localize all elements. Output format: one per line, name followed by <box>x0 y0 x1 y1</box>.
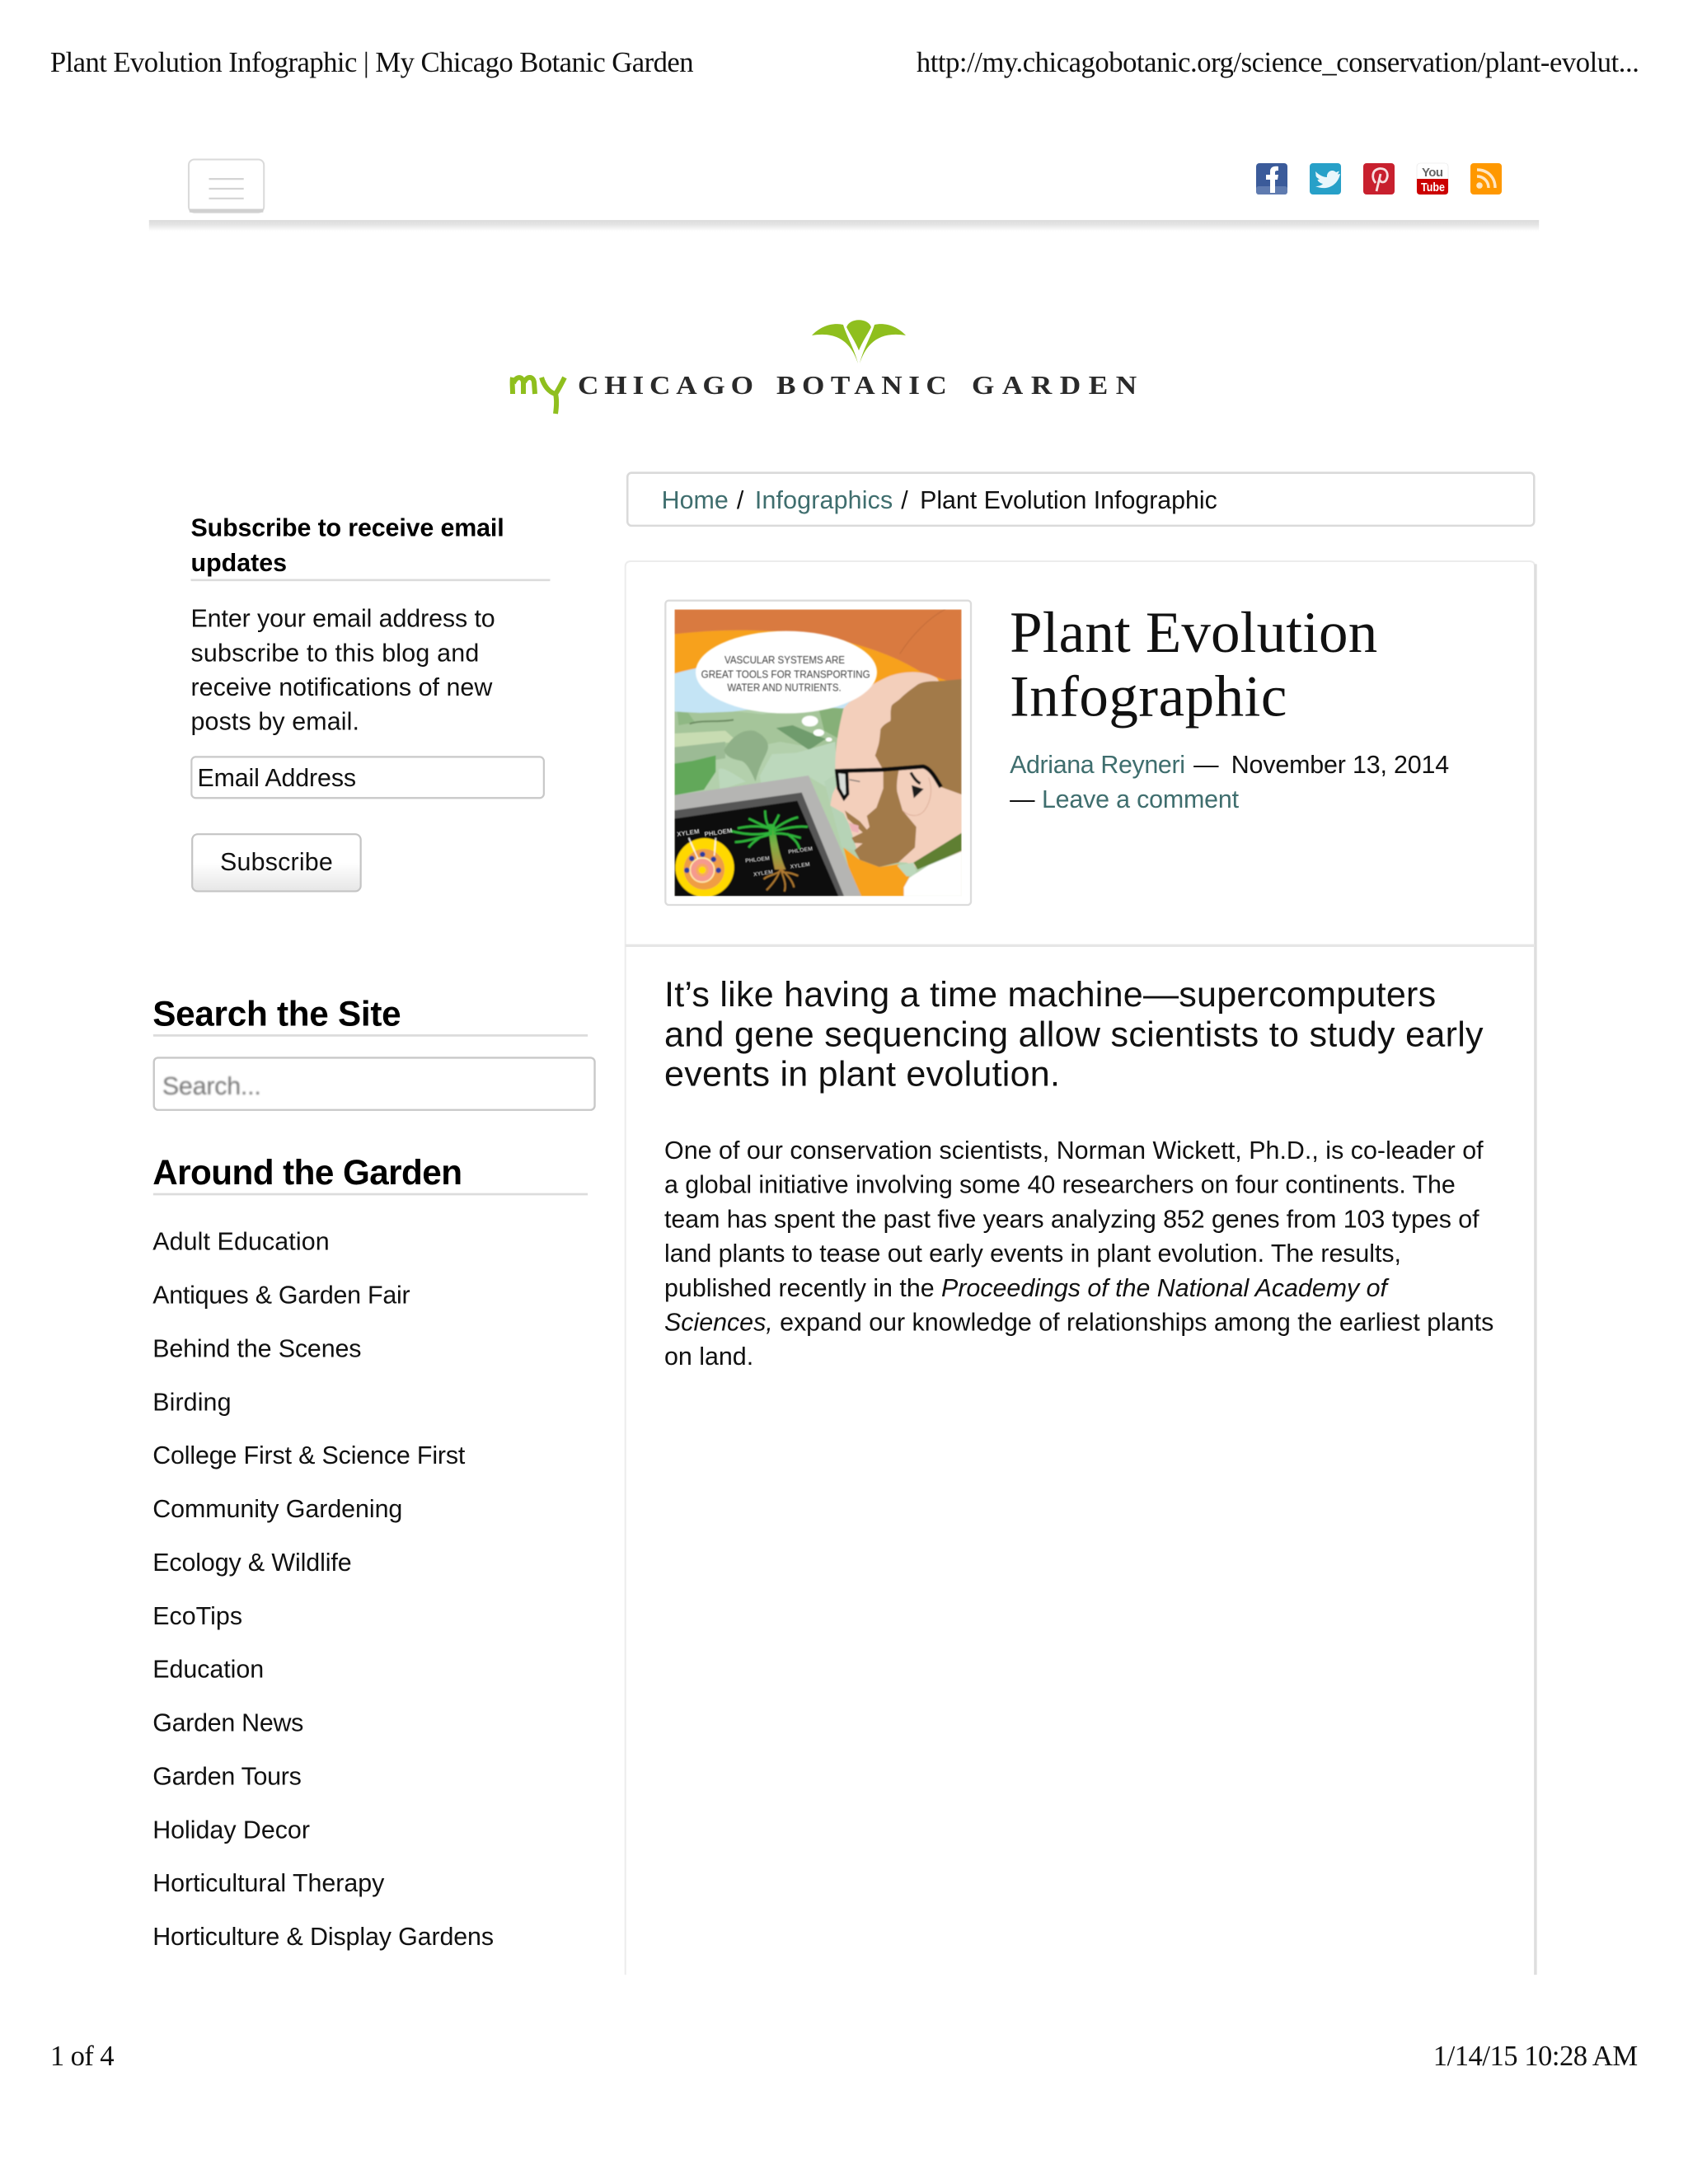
beard <box>845 769 917 867</box>
logo wordmark: Chicago Botanic Garden: CHICAGO <box>578 371 753 401</box>
article body text: team has spent the past five years analyzing 852 genes from 103 types of <box>664 1206 1479 1234</box>
category list: Community Gardening <box>152 1495 402 1523</box>
article intro: and gene sequencing allow scientists to study early <box>664 1015 1484 1054</box>
article meta: author and date: — <box>1010 785 1035 813</box>
logo wordmark: Chicago Botanic Garden: GARDEN <box>972 371 1137 401</box>
breadcrumb bar: Home <box>662 486 729 514</box>
thought bubble: GREAT TOOLS FOR TRANSPORTING <box>701 669 870 681</box>
subscribe heading: Subscribe to receive email <box>190 514 504 542</box>
article intro: events in plant evolution. <box>664 1055 1060 1094</box>
category list: College First & Science First <box>152 1441 466 1469</box>
breadcrumb bar <box>627 473 1534 526</box>
icon: youtube: You <box>1422 166 1443 180</box>
icon: green leaf <box>812 319 906 363</box>
article title: Plant Evolution <box>1010 601 1377 665</box>
logo wordmark: Chicago Botanic Garden <box>578 371 1137 401</box>
article title <box>1010 601 1377 729</box>
category list: EcoTips <box>152 1602 242 1630</box>
breadcrumb bar: Plant Evolution Infographic <box>920 486 1217 514</box>
search heading: Search the Site <box>152 995 401 1033</box>
subscribe button <box>192 834 361 891</box>
category list: Education <box>152 1655 264 1683</box>
article body text <box>664 1137 1493 1371</box>
ear <box>903 777 931 816</box>
article body text: on land. <box>664 1343 753 1371</box>
article body text: land plants to tease out early events in plant evolution. The results, <box>664 1240 1401 1268</box>
tablet screen labels: XYLEM <box>790 862 810 870</box>
tablet screen labels: PHLOEM <box>788 846 814 855</box>
subscribe description: Enter your email address to <box>190 604 495 632</box>
panel: article <box>626 561 1536 1975</box>
head skin <box>830 673 962 868</box>
logo wordmark: my: my <box>511 393 513 395</box>
icon: twitter <box>1310 163 1341 194</box>
article body text: published recently in the Proceedings of the National Academy of <box>664 1274 1390 1302</box>
tablet screen labels <box>677 827 814 878</box>
panel outline <box>626 561 1535 1975</box>
article meta: author and date: Adriana Reyneri <box>1010 751 1185 779</box>
article meta: author and date: November 13, 2014 <box>1231 751 1449 779</box>
icon: facebook <box>1256 163 1287 194</box>
article title: Infographic <box>1010 665 1287 729</box>
thought bubble: VASCULAR SYSTEMS ARE <box>724 654 845 666</box>
social icons <box>1256 163 1502 194</box>
subscribe description <box>190 604 495 735</box>
article body text: Sciences, expand our knowledge of relationships among the earliest plants <box>664 1309 1493 1337</box>
article intro: It’s like having a time machine—supercomputers <box>664 975 1436 1015</box>
category list: Horticultural Therapy <box>152 1869 385 1897</box>
article body text: One of our conservation scientists, Norman Wickett, Ph.D., is co-leader of <box>664 1137 1484 1165</box>
tablet screen labels: PHLOEM <box>745 856 770 865</box>
icon: menu button <box>189 159 264 213</box>
thought bubble: WATER AND NUTRIENTS. <box>727 682 842 694</box>
breadcrumb bar: / <box>737 486 744 514</box>
category list: Holiday Decor <box>152 1816 310 1844</box>
tablet screen labels: PHLOEM <box>704 827 733 838</box>
thought bubble <box>696 631 877 742</box>
article meta: author and date: Leave a comment <box>1042 785 1240 813</box>
glasses <box>835 766 941 787</box>
logo: My Chicago Botanic Garden <box>511 319 1137 414</box>
category list: Antiques & Garden Fair <box>152 1282 410 1310</box>
navigation bar line <box>149 220 1539 232</box>
article meta: author and date: — <box>1193 751 1219 779</box>
icon: rss <box>1470 163 1502 194</box>
page header: document title: Plant Evolution Infographic | My Chicago Botanic Garden <box>50 47 694 78</box>
breadcrumb bar: Infographics <box>755 486 893 514</box>
sidebar: around the garden <box>152 1153 588 1951</box>
sidebar: subscribe widget <box>190 514 550 891</box>
category list: Birding <box>152 1389 232 1417</box>
tablet <box>674 776 861 896</box>
category list: Horticulture & Display Gardens <box>152 1923 494 1951</box>
logo wordmark: Chicago Botanic Garden: BOTANIC <box>776 371 947 401</box>
category list: Garden Tours <box>152 1762 302 1790</box>
around the garden heading: Around the Garden <box>152 1153 462 1192</box>
category list: Garden News <box>152 1708 303 1736</box>
tablet screen labels: XYLEM <box>753 869 774 878</box>
hair <box>875 679 962 794</box>
email input <box>191 757 544 798</box>
category list: Adult Education <box>152 1228 330 1256</box>
subscribe button: Subscribe <box>220 848 333 876</box>
page footer: print timestamp: 1/14/15 10:28 AM <box>1433 2041 1638 2072</box>
category list: Behind the Scenes <box>152 1335 361 1363</box>
stem cross-section <box>675 838 734 897</box>
orange chair and shirt <box>843 847 909 896</box>
subscribe heading <box>190 514 550 580</box>
icon: youtube <box>1417 163 1448 194</box>
plant tree <box>768 824 785 869</box>
subscribe heading: updates <box>190 549 287 577</box>
category list <box>152 1228 494 1951</box>
article intro <box>664 975 1484 1094</box>
article meta: author and date <box>1010 751 1449 813</box>
category list: Ecology & Wildlife <box>152 1549 352 1577</box>
search box <box>154 1057 595 1110</box>
subscribe description: posts by email. <box>190 707 359 735</box>
logo wordmark: my <box>511 377 565 414</box>
illustration: scientist with plant vascular system on a tablet <box>665 601 971 905</box>
sidebar: search the site <box>152 995 595 1110</box>
page header: source URL: http://my.chicagobotanic.org/science_conservation/plant-evolut... <box>917 47 1639 78</box>
article body text: a global initiative involving some 40 researchers on four continents. The <box>664 1170 1456 1198</box>
tablet screen labels: XYLEM <box>677 827 701 838</box>
subscribe description: subscribe to this blog and <box>190 640 479 668</box>
breadcrumb bar: / <box>901 486 908 514</box>
icon: youtube: Tube <box>1421 180 1445 194</box>
email input: Email Address <box>197 764 356 792</box>
search box: Search... <box>162 1072 261 1100</box>
window landscape <box>676 709 961 897</box>
subscribe description: receive notifications of new <box>190 673 493 701</box>
page footer: page number: 1 of 4 <box>50 2041 115 2072</box>
icon: pinterest <box>1363 163 1395 194</box>
